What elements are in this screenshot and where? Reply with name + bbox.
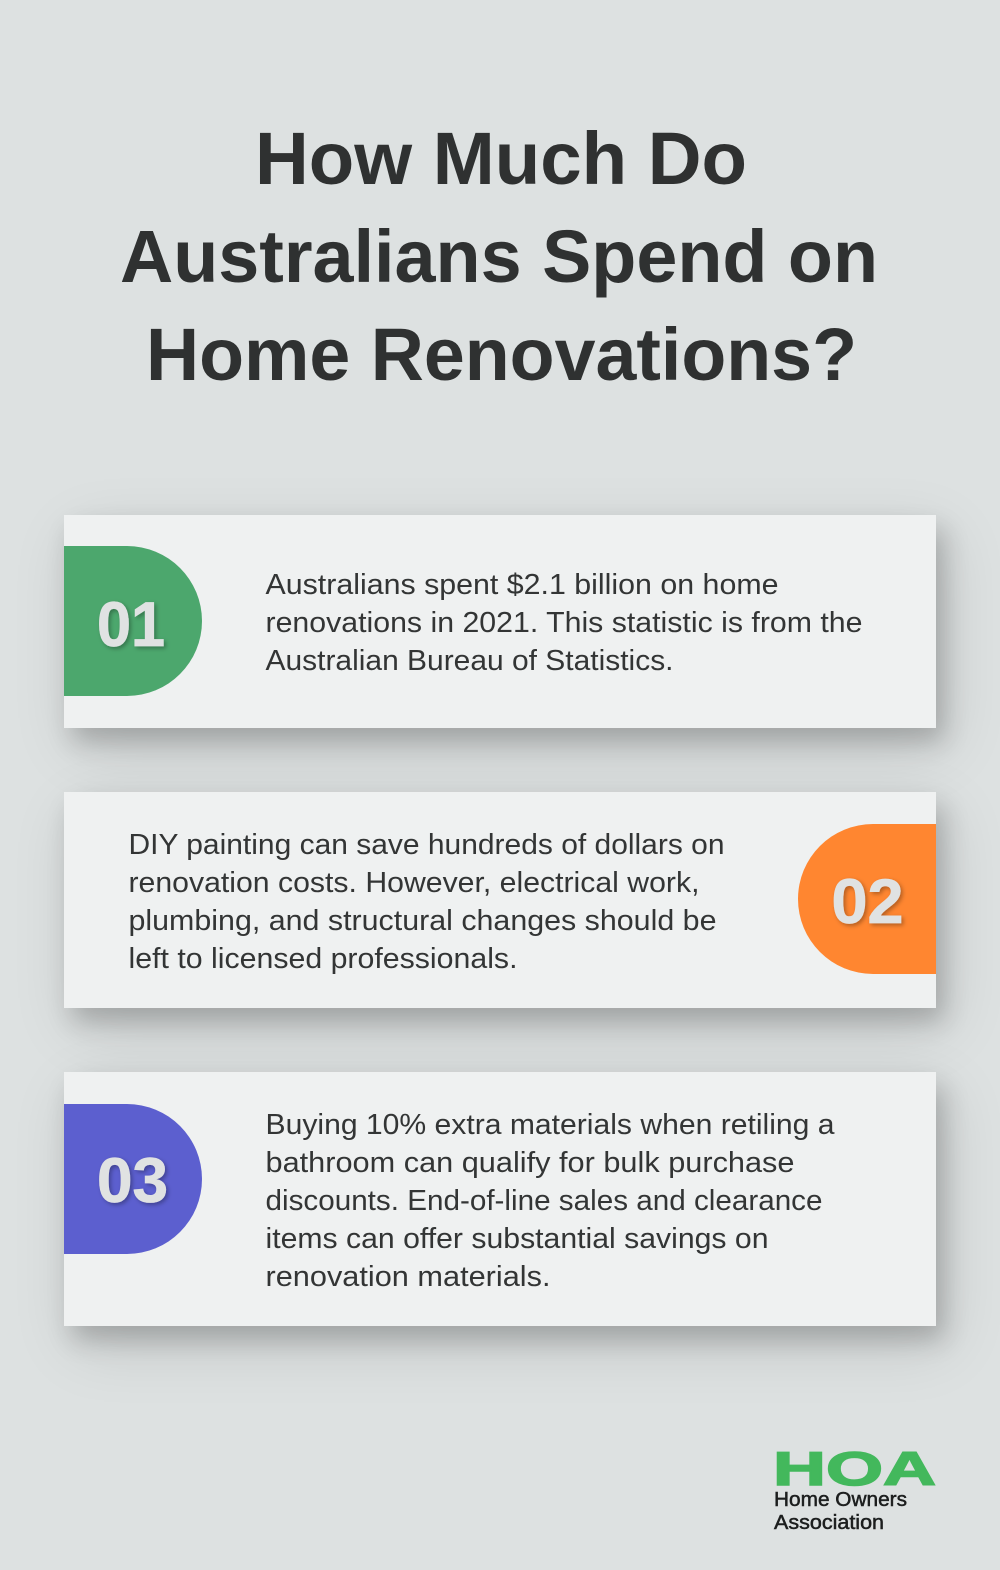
badge 01: 01: [97, 590, 165, 660]
logo: Home Owners Association: Association: [774, 1512, 884, 1534]
panel: card 01: [64, 515, 936, 728]
panel: card 03: [64, 1072, 936, 1326]
logo: Home Owners Association: Home Owners: [774, 1489, 907, 1511]
text block 02: renovation costs. However, electrical work,: [128, 867, 700, 899]
badge 02: [798, 824, 936, 974]
text block 03: [266, 1109, 835, 1293]
badge 03: 03: [97, 1146, 168, 1216]
badge 01: [64, 546, 202, 696]
title: Home Renovations?: [146, 313, 857, 396]
text block 01: renovations in 2021. This statistic is from the: [266, 607, 862, 639]
text block 02: [128, 829, 724, 975]
logo: Home Owners Association: [773, 1442, 936, 1534]
text block 01: [266, 569, 862, 677]
text block 03: bathroom can qualify for bulk purchase: [266, 1147, 794, 1179]
title: How Much Do: [255, 117, 747, 200]
panel: card 02: [64, 792, 936, 1008]
text block 01: Australians spent $2.1 billion on home: [266, 569, 778, 601]
logo: Home Owners Association: HOA: [773, 1442, 936, 1495]
text block 03: items can offer substantial savings on: [266, 1223, 768, 1255]
text block 02: left to licensed professionals.: [128, 943, 518, 975]
badge 02: 02: [832, 867, 904, 937]
text block 03: renovation materials.: [266, 1261, 550, 1293]
text block 03: Buying 10% extra materials when retiling a: [266, 1109, 835, 1141]
text block 02: plumbing, and structural changes should be: [128, 905, 717, 937]
title: [120, 117, 878, 396]
text block 02: DIY painting can save hundreds of dollars on: [128, 829, 724, 861]
text block 03: discounts. End-of-line sales and clearance: [266, 1185, 822, 1217]
text block 01: Australian Bureau of Statistics.: [266, 645, 674, 677]
title: Australians Spend on: [120, 215, 878, 298]
badge 03: [64, 1104, 202, 1254]
